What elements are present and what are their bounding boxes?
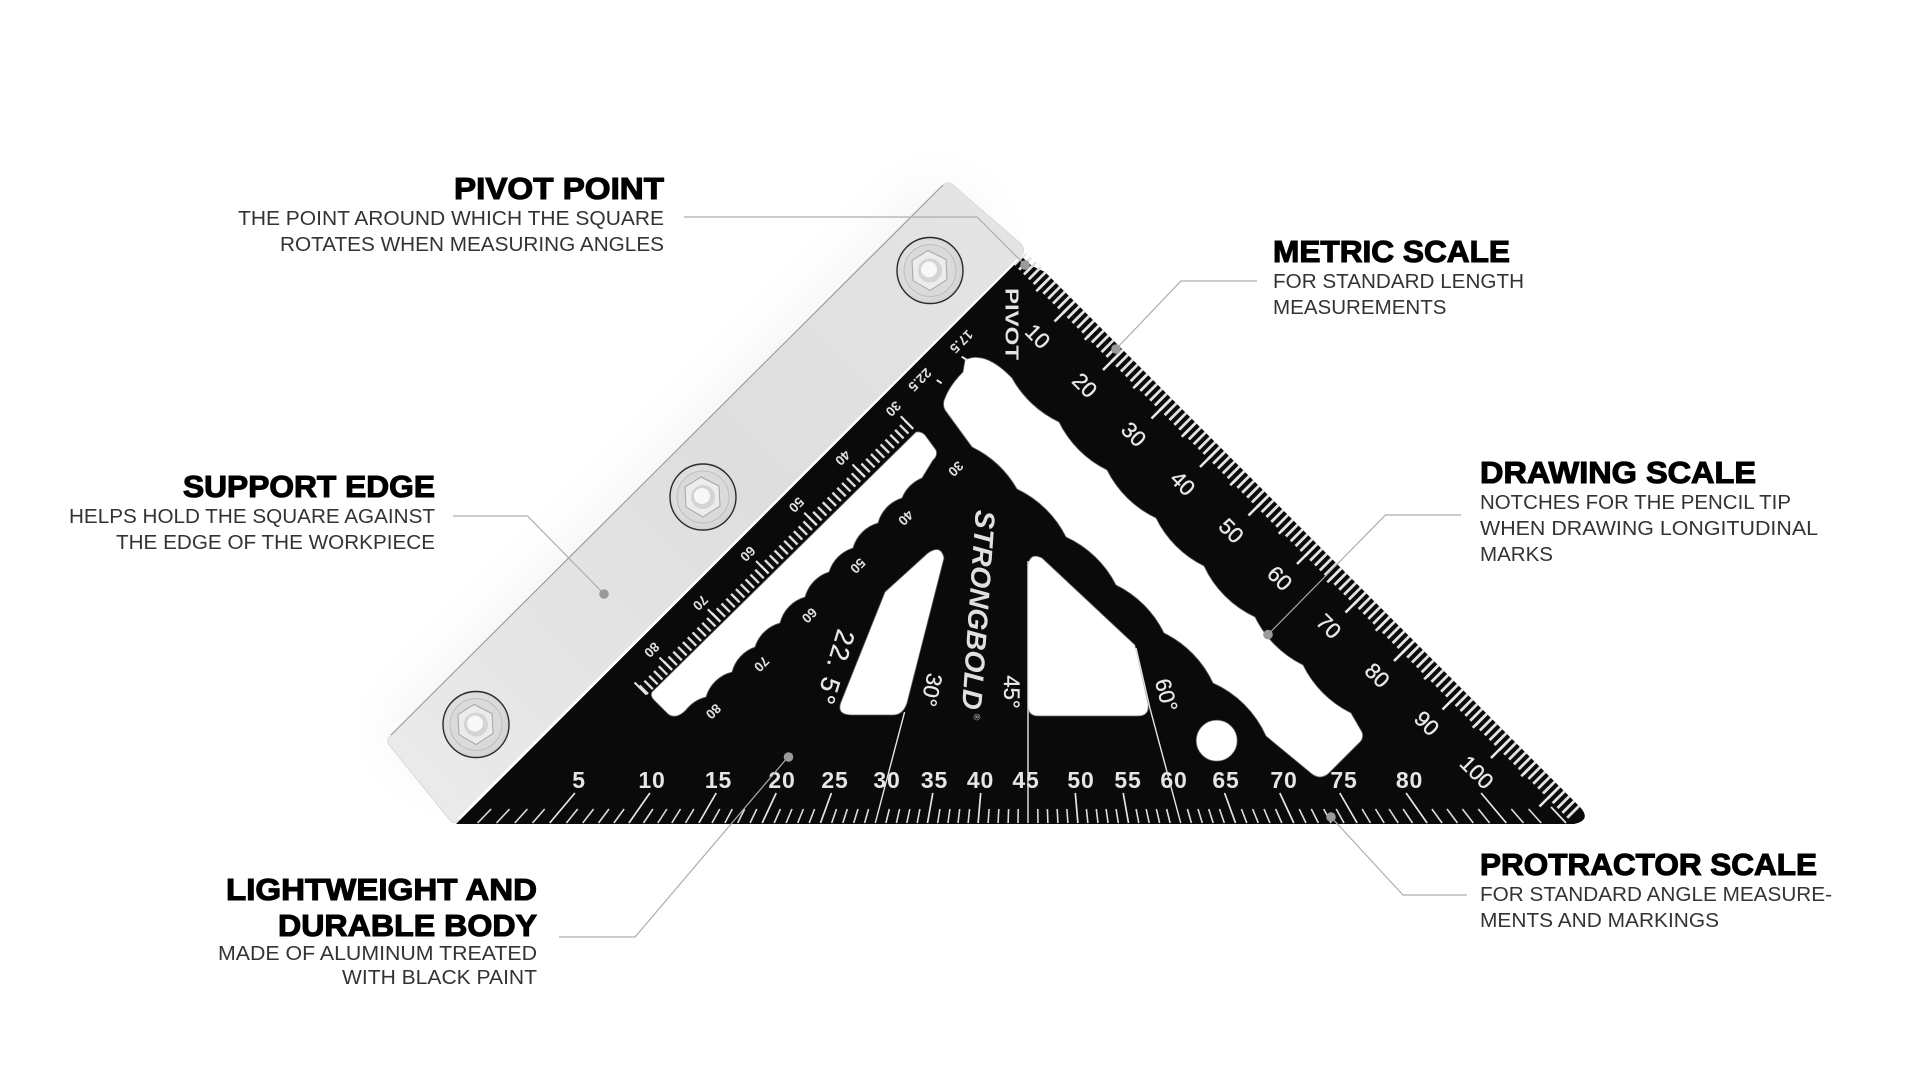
inner scale numbers: 17.5: [947, 327, 976, 356]
callout: support edge: [69, 469, 609, 599]
description: drawing scale: WHEN DRAWING LONGITUDINAL: [1480, 518, 1818, 540]
leader: body: [559, 752, 793, 937]
metric scale: [1020, 259, 1575, 813]
leader: metric scale: [1111, 281, 1257, 354]
protractor numbers: 65: [1212, 767, 1240, 793]
protractor numbers: [572, 767, 1423, 793]
degree reference lines 30 45 60: [875, 561, 1181, 823]
slot: long lower-left notched: [651, 432, 937, 716]
metric major ticks: [1036, 277, 1560, 806]
protractor numbers: 30: [873, 767, 901, 793]
inner scale numbers: 22.5: [905, 365, 934, 395]
description: drawing scale: MARKS: [1480, 544, 1553, 566]
angle label 45: 45°: [999, 675, 1024, 709]
description: metric scale: [1273, 271, 1524, 319]
description: drawing scale: NOTCHES FOR THE PENCIL TIP: [1480, 492, 1791, 514]
metric minor ticks: [1020, 259, 1575, 813]
window: 22.5 degree triangle: [840, 549, 944, 715]
inner scale numbers: [641, 327, 976, 660]
angle label 60: 60°: [1150, 676, 1183, 714]
metric numbers: 100: [1455, 750, 1499, 794]
protractor numbers: 10: [638, 767, 666, 793]
protractor numbers: 70: [1270, 767, 1298, 793]
slot-side numbers: [703, 458, 966, 722]
metric numbers: 80: [1360, 658, 1395, 693]
registered mark: ®: [972, 713, 982, 721]
callout: metric scale: [1111, 234, 1524, 354]
metric numbers: 20: [1067, 368, 1102, 403]
protractor numbers: 35: [921, 767, 948, 793]
protractor numbers: 60: [1160, 767, 1188, 793]
angle label 22.5: 22. 5°: [810, 626, 861, 708]
description: support edge: HELPS HOLD THE SQUARE AGAINST: [69, 506, 435, 528]
protractor numbers: 80: [1396, 767, 1423, 793]
inner scale numbers: 70: [690, 592, 711, 613]
metric numbers: [1020, 319, 1499, 794]
protractor numbers: 25: [821, 767, 849, 793]
aluminum support edge bar: [388, 183, 1024, 823]
rafter square tool: [388, 183, 1585, 824]
PIVOT engraving: PIVOT: [1002, 288, 1022, 360]
STRONGBOLD logo: STRONGBOLD: [956, 509, 1001, 711]
inner scale numbers: 40: [832, 447, 853, 468]
slot-side numbers: 40: [895, 507, 916, 528]
heading: protractor scale: PROTRACTOR SCALE: [1480, 847, 1817, 882]
heading: pivot point: PIVOT POINT: [454, 171, 664, 206]
protractor numbers: 45: [1012, 767, 1040, 793]
callout: drawing scale: [1263, 455, 1818, 639]
description: body: [218, 943, 537, 989]
protractor minor ticks: [478, 809, 1541, 823]
metric numbers: 90: [1409, 706, 1444, 741]
description: metric scale: MEASUREMENTS: [1273, 297, 1446, 319]
description: support edge: [69, 506, 435, 554]
heading: body: LIGHTWEIGHT AND: [226, 872, 537, 907]
slot-side numbers: 30: [945, 458, 966, 479]
round hole: [1196, 720, 1237, 761]
description: body: MADE OF ALUMINUM TREATED: [218, 943, 537, 965]
leader: drawing scale: [1263, 515, 1461, 639]
protractor numbers: 15: [705, 767, 732, 793]
protractor numbers: 55: [1114, 767, 1142, 793]
description: body: WITH BLACK PAINT: [342, 967, 537, 989]
leader: protractor scale: [1326, 812, 1467, 895]
protractor numbers: 75: [1330, 767, 1358, 793]
leader: support edge: [453, 516, 609, 599]
description: protractor scale: [1480, 884, 1832, 932]
description: protractor scale: FOR STANDARD ANGLE MEASURE-: [1480, 884, 1832, 906]
inner scale numbers: 80: [641, 639, 662, 660]
protractor major ticks: [550, 793, 1566, 823]
heading: metric scale: METRIC SCALE: [1273, 234, 1510, 269]
slot-side numbers: 60: [799, 605, 820, 626]
metric numbers: 40: [1165, 466, 1200, 501]
heading: body: [226, 872, 537, 943]
heading: drawing scale: DRAWING SCALE: [1480, 455, 1756, 490]
metric numbers: 60: [1262, 561, 1297, 596]
protractor scale: [478, 561, 1566, 823]
protractor numbers: 40: [967, 767, 994, 793]
metric numbers: 70: [1311, 609, 1346, 644]
black aluminum body: [456, 257, 1585, 824]
description: pivot point: THE POINT AROUND WHICH THE SQUARE: [238, 208, 664, 230]
metric numbers: 30: [1116, 417, 1151, 452]
protractor numbers: 20: [768, 767, 796, 793]
description: drawing scale: [1480, 492, 1818, 566]
description: pivot point: [238, 208, 664, 256]
inner scale numbers: 50: [786, 494, 807, 515]
heading: body: DURABLE BODY: [278, 908, 537, 943]
inner scale numbers: 30: [883, 398, 904, 419]
screw top: [897, 238, 963, 304]
description: support edge: THE EDGE OF THE WORKPIECE: [116, 532, 435, 554]
metric numbers: 10: [1020, 319, 1055, 354]
window: 45 degree triangle: [1028, 556, 1148, 716]
description: pivot point: ROTATES WHEN MEASURING ANGLES: [280, 234, 664, 256]
inner hip scale along left slot: [634, 327, 976, 722]
description: metric scale: FOR STANDARD LENGTH: [1273, 271, 1524, 293]
screw bottom: [443, 692, 509, 758]
screw middle: [670, 464, 736, 530]
metric numbers: 50: [1214, 513, 1249, 548]
callout: protractor scale: [1326, 812, 1832, 932]
inner scale numbers: 60: [737, 543, 758, 564]
slot: drawing scale notches: [944, 357, 1363, 777]
callout: lightweight and durable body: [218, 752, 793, 989]
protractor numbers: 5: [572, 767, 586, 793]
inner scale major ticks: [634, 357, 967, 694]
heading: support edge: SUPPORT EDGE: [183, 469, 435, 504]
soft shadow around support edge: [380, 175, 1000, 790]
slot-side numbers: 50: [847, 555, 868, 576]
callout: pivot point: [238, 171, 1030, 270]
angle label 30: 30°: [916, 671, 947, 709]
inner scale minor ticks: [643, 424, 909, 691]
description: protractor scale: MENTS AND MARKINGS: [1480, 910, 1719, 932]
slot-side numbers: 70: [751, 653, 772, 675]
leader: pivot point: [684, 217, 1030, 270]
protractor numbers: 50: [1067, 767, 1095, 793]
slot-side numbers: 80: [703, 701, 724, 722]
